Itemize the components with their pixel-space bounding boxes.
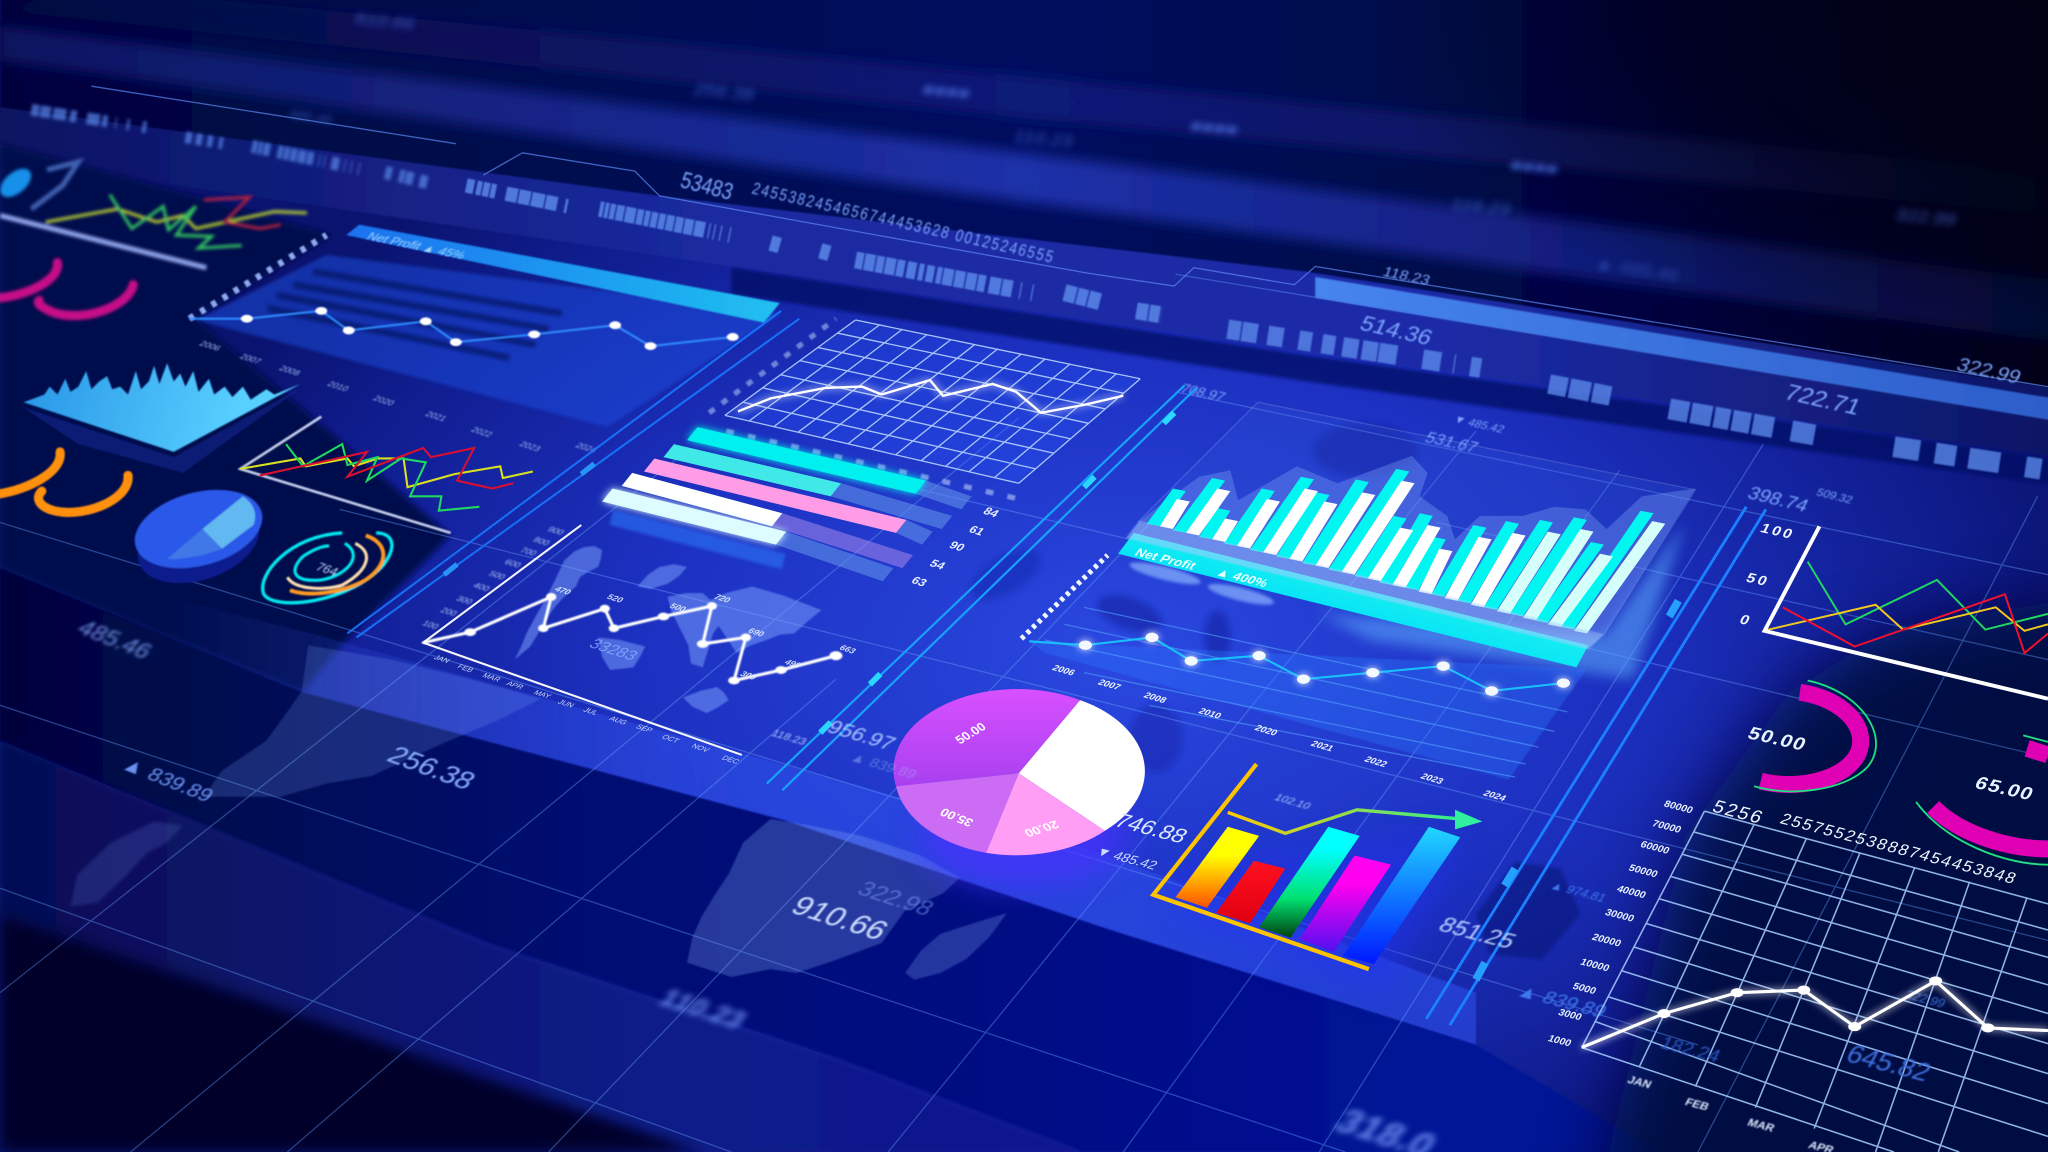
map — [515, 546, 822, 713]
point labels: 300 — [738, 670, 759, 681]
y labels — [1546, 799, 1695, 1049]
barcode row: far left — [31, 110, 428, 183]
y labels: 50000 — [1626, 863, 1660, 880]
chart: world map line chart — [420, 525, 858, 766]
label: 118.23: 118.23 — [1380, 264, 1432, 288]
year labels: 2023 — [1418, 772, 1445, 786]
label: 956.97: 956.97 — [823, 716, 900, 754]
bar teal — [664, 444, 841, 496]
line series — [189, 307, 739, 350]
bar values: 90 — [946, 539, 968, 554]
mid labels — [769, 716, 1611, 1022]
y labels: 50 — [1743, 571, 1772, 590]
axes — [1765, 526, 2048, 699]
point labels: 490 — [782, 658, 804, 670]
x axis labels: APR — [504, 680, 526, 691]
white series — [1582, 981, 2048, 1048]
far blurred labels: ▲ 485.46 — [1592, 254, 1682, 285]
foreground black — [0, 913, 701, 1152]
divider: left double line — [347, 311, 799, 637]
year labels: 2024 — [573, 441, 599, 454]
barcode band — [0, 107, 2048, 457]
line series — [1029, 637, 1563, 691]
x axis labels: SEP — [634, 723, 655, 734]
dark gutter under barcodes — [731, 268, 2048, 486]
y labels: 70000 — [1650, 819, 1683, 836]
row lines — [1045, 607, 1567, 777]
bar yellow — [1176, 827, 1259, 908]
yellow series — [1763, 605, 2048, 631]
lower-right dark — [1587, 588, 2048, 1152]
y axis labels: 200 — [438, 606, 459, 618]
x axis labels: MAR — [480, 672, 503, 683]
far blurred labels: 116.23 — [1449, 194, 1514, 218]
dark continent blobs — [963, 424, 1417, 772]
series — [423, 593, 842, 684]
pie glow — [921, 786, 1130, 886]
point labels: 520 — [605, 593, 626, 604]
banner — [346, 225, 780, 323]
label: 110.23: 110.23 — [653, 984, 753, 1034]
red series — [260, 448, 513, 488]
far blurred labels: 110.23 — [1011, 126, 1076, 150]
far blurred labels: ■■■■ — [1187, 116, 1241, 139]
far blurred labels: ■■■■ — [920, 79, 974, 102]
label: 398.74: 398.74 — [1744, 484, 1812, 516]
y axis dots — [1021, 555, 1108, 639]
strip text: Net Profit — [1132, 546, 1200, 572]
slice 20.00 — [986, 773, 1105, 855]
upper-left dark field — [0, 144, 451, 692]
x axis labels: MAY — [532, 689, 553, 700]
year labels: 2008 — [277, 364, 303, 377]
barcode row: right — [1228, 329, 2048, 470]
month labels — [1625, 1075, 1836, 1152]
continent: Americas — [204, 645, 541, 797]
y labels: 5000 — [1571, 981, 1598, 997]
year labels: 2021 — [1308, 739, 1336, 754]
pie labels: 20.00 — [1021, 818, 1062, 840]
haze panel — [1029, 641, 1587, 780]
bar red — [1216, 861, 1285, 923]
far blurred labels — [286, 9, 1959, 285]
y labels: 40000 — [1615, 884, 1648, 901]
y axis labels: 100 — [420, 619, 441, 631]
y axis labels: 300 — [454, 594, 475, 606]
chart label: 102.10 — [1272, 792, 1313, 812]
label: 708.97: 708.97 — [1177, 382, 1228, 405]
label: 322.99: 322.99 — [1953, 355, 2024, 388]
mid band — [0, 741, 1084, 1152]
donuts: magenta, blurred — [0, 263, 133, 316]
axes — [240, 417, 451, 533]
bar blue — [1343, 827, 1460, 964]
arrow head — [1455, 810, 1482, 829]
bar values: 61 — [966, 523, 988, 538]
x axis labels: NOV — [689, 742, 712, 754]
label: 839.89 right: ▲ 839.89 — [1512, 982, 1611, 1022]
divider: right double line — [1426, 507, 1766, 1025]
glass lip — [1126, 521, 1604, 649]
axes — [1153, 764, 1369, 969]
divider: centre double line — [767, 385, 1196, 790]
label: 485.42 top: ▼ 485.42 — [1451, 413, 1507, 436]
year labels: 2020 — [371, 394, 397, 407]
year labels: 2006 — [197, 339, 223, 352]
x axis labels: DEC — [720, 754, 742, 766]
horizontal progress bars — [602, 427, 1002, 589]
label: 322.98: 322.98 — [852, 877, 939, 921]
x axis labels: OCT — [660, 733, 682, 745]
far blurred labels: 485.46 — [286, 107, 334, 127]
light band — [131, 588, 1476, 1045]
pie labels: 35.00 — [937, 805, 976, 830]
connector outline — [91, 86, 2048, 387]
point labels: 720 — [712, 593, 733, 604]
label: 839 dim: ▲ 839.89 — [847, 750, 920, 782]
top barcode strip — [31, 86, 2048, 470]
label: 485.46: 485.46 — [72, 616, 157, 664]
white line — [738, 380, 1123, 413]
ring gauge: 764 — [313, 560, 342, 578]
y labels: 80000 — [1662, 799, 1695, 816]
value: 65.00 — [1971, 773, 2038, 805]
x axis labels: JUL — [581, 706, 601, 717]
y axis dashes — [189, 235, 327, 319]
label: 514.36: 514.36 — [1356, 311, 1437, 349]
bar white — [622, 473, 782, 526]
year labels: 2007 — [1095, 678, 1123, 692]
outline — [1754, 680, 1876, 791]
pale bars — [1497, 521, 1665, 633]
label: 851.25: 851.25 — [1433, 913, 1521, 954]
gauge: 65.00 — [1916, 735, 2048, 865]
dark stripes — [268, 272, 562, 358]
banner text: Net Profit ▲ 45% — [364, 230, 468, 261]
far blurred labels: 322.99 — [1893, 205, 1959, 229]
y labels: 20000 — [1590, 932, 1623, 949]
yellow series — [240, 458, 533, 487]
label: 839.89: ▲ 839.89 — [117, 753, 218, 806]
far blurred labels: 256.38 — [691, 79, 758, 103]
bar glow — [611, 517, 784, 562]
label: 645.82: 645.82 — [1841, 1040, 1936, 1087]
panel fill — [196, 255, 781, 427]
bar magenta — [1300, 856, 1391, 952]
far blurred labels: ■■■■ — [1507, 155, 1561, 178]
y labels: 60000 — [1638, 840, 1671, 857]
rainbow bar chart — [1153, 764, 1482, 993]
panel: cyan bar chart — [1118, 402, 1695, 679]
green series — [1808, 562, 2048, 630]
point labels: 690 — [746, 626, 767, 638]
bar values: 84 — [980, 505, 1002, 520]
blurred sub labels — [1128, 558, 1275, 609]
bar cyan-green — [1259, 827, 1360, 938]
wide band — [0, 26, 2048, 342]
top dark field — [0, 0, 2048, 398]
x axis labels: JAN — [432, 654, 452, 665]
x labels — [726, 431, 1019, 499]
value: 50.00 — [1744, 724, 1811, 755]
label: 974.81: ▲ 974.81 — [1547, 879, 1609, 905]
perspective grid lines — [0, 274, 2048, 1152]
points — [1079, 633, 1570, 696]
Net Profit strip — [1118, 533, 1588, 667]
year labels: 2024 — [1481, 789, 1509, 804]
green series — [286, 444, 479, 511]
cyan bars — [1147, 469, 1654, 630]
wide light header bar — [1315, 277, 2048, 422]
continent: Africa — [687, 819, 960, 977]
arc — [1761, 692, 1861, 785]
year labels: 2006 — [1050, 663, 1077, 678]
grid — [725, 320, 1140, 483]
dark band — [0, 568, 1659, 1152]
bar values — [909, 505, 1002, 589]
top number strip — [678, 167, 2024, 516]
chart: bottom-right grid — [1546, 797, 2048, 1152]
year labels: 2022 — [469, 425, 495, 439]
island: Madagascar — [905, 913, 1007, 980]
heading: digit string: 2557552538887454453848 — [1777, 810, 2021, 888]
year labels: 2007 — [238, 352, 264, 365]
y labels: 100 — [1758, 521, 1797, 542]
y axis labels — [420, 525, 567, 631]
month labels: MAR — [1745, 1117, 1777, 1135]
glass panel — [1139, 402, 1695, 635]
y labels: 3000 — [1556, 1008, 1584, 1023]
chart: top centre grid — [709, 319, 1140, 499]
arc — [1933, 748, 2048, 849]
label: 746.88: 746.88 — [1110, 809, 1193, 847]
chart: multi-colour lines, left — [240, 417, 533, 533]
y labels: 10000 — [1578, 957, 1611, 974]
pie labels: 50.00 — [952, 720, 989, 747]
bar cyan — [687, 427, 926, 494]
point labels — [552, 585, 858, 681]
slice 50.00 — [893, 689, 1080, 786]
far band — [0, 0, 2048, 216]
month labels: JAN — [1625, 1075, 1653, 1091]
year labels: 2010 — [1196, 707, 1223, 721]
under glow — [1176, 836, 1463, 993]
map label: 33283 — [585, 636, 642, 664]
label: 22.99: 322.99 — [1903, 987, 1948, 1010]
year labels: 2021 — [423, 410, 449, 423]
grid — [1582, 811, 2048, 1152]
y axis labels: 700 — [518, 546, 539, 558]
y labels: 30000 — [1603, 908, 1636, 925]
point labels: 663 — [837, 643, 858, 655]
continent: far left — [71, 822, 183, 906]
pie: blue — [126, 477, 271, 598]
panel: line chart with year labels — [1021, 555, 1587, 804]
panel: Net Profit blue — [189, 225, 781, 454]
label: 485.42: ▼ 485.42 — [1093, 844, 1161, 872]
y labels — [1737, 521, 1797, 629]
slice white — [1019, 700, 1145, 831]
year labels: 2022 — [1362, 755, 1389, 769]
outline — [1916, 735, 2048, 865]
area chart: blue — [24, 363, 303, 473]
label: 53483: 53483 — [678, 167, 736, 205]
label: digit string: 2455382454656744453628 00125246555 — [750, 180, 1057, 267]
year labels: 2010 — [325, 380, 351, 393]
y labels: 1000 — [1546, 1034, 1573, 1049]
chart: top-left coloured lines — [0, 162, 307, 268]
label: 910.66: 910.66 — [785, 892, 894, 946]
points — [1657, 976, 1994, 1032]
y labels: 0 — [1737, 613, 1755, 629]
chart: top-right coloured lines — [1737, 521, 2048, 699]
month labels: FEB — [1683, 1097, 1711, 1113]
year labels — [1050, 663, 1509, 804]
x axis labels — [432, 654, 742, 766]
lower-left labels — [72, 616, 1444, 1152]
y axis labels: 800 — [531, 535, 552, 547]
label: 722.71: 722.71 — [1780, 380, 1865, 420]
axes — [423, 525, 742, 755]
barcode row: centre — [466, 185, 1161, 315]
x axis labels: AUG — [607, 715, 629, 726]
ring gauge — [263, 533, 392, 603]
pie chart — [893, 689, 1145, 886]
x axis labels: FEB — [455, 663, 476, 674]
x axis labels: JUN — [556, 698, 576, 709]
bloom under panel — [1319, 522, 1685, 679]
bar values: 63 — [909, 574, 930, 589]
y axis labels: 900 — [545, 525, 567, 537]
donuts: orange — [0, 452, 128, 512]
world map silhouette — [71, 424, 1580, 980]
slice 35.00 — [896, 773, 1019, 853]
y labels — [709, 319, 836, 413]
label: 509.32: 509.32 — [1814, 487, 1854, 506]
label: 118.23: 118.23 — [769, 728, 809, 748]
pie labels — [937, 720, 1062, 840]
year labels: 2020 — [1252, 724, 1280, 738]
gauge: 50.00 — [1744, 680, 1876, 791]
far blurred labels: 910.66 — [351, 9, 418, 33]
year labels — [197, 339, 599, 454]
label: 182: 182.24 — [1656, 1034, 1724, 1067]
trend line — [1228, 810, 1460, 833]
strip value: ▲ 400% — [1213, 565, 1272, 590]
label: 256.38: 256.38 — [382, 741, 482, 795]
bar values: 54 — [927, 557, 949, 572]
label: 531.67: 531.67 — [1422, 429, 1482, 456]
white bars — [1160, 481, 1526, 607]
heading: 5256: 5256 — [1709, 797, 1768, 828]
year labels: 2023 — [517, 440, 543, 453]
y axis labels: 400 — [471, 581, 492, 593]
red series — [1783, 594, 2048, 653]
tracks — [772, 481, 972, 581]
point labels: 470 — [552, 585, 574, 596]
bar pink — [644, 458, 906, 533]
point labels: 500 — [667, 602, 689, 613]
year labels: 2008 — [1141, 691, 1169, 706]
backdrop mountain — [1139, 456, 1695, 635]
bar pale — [602, 488, 786, 545]
y axis labels: 500 — [487, 569, 508, 581]
y axis labels: 600 — [502, 558, 523, 569]
continent: right dark — [1476, 862, 1580, 960]
grid backdrop — [725, 320, 1140, 483]
